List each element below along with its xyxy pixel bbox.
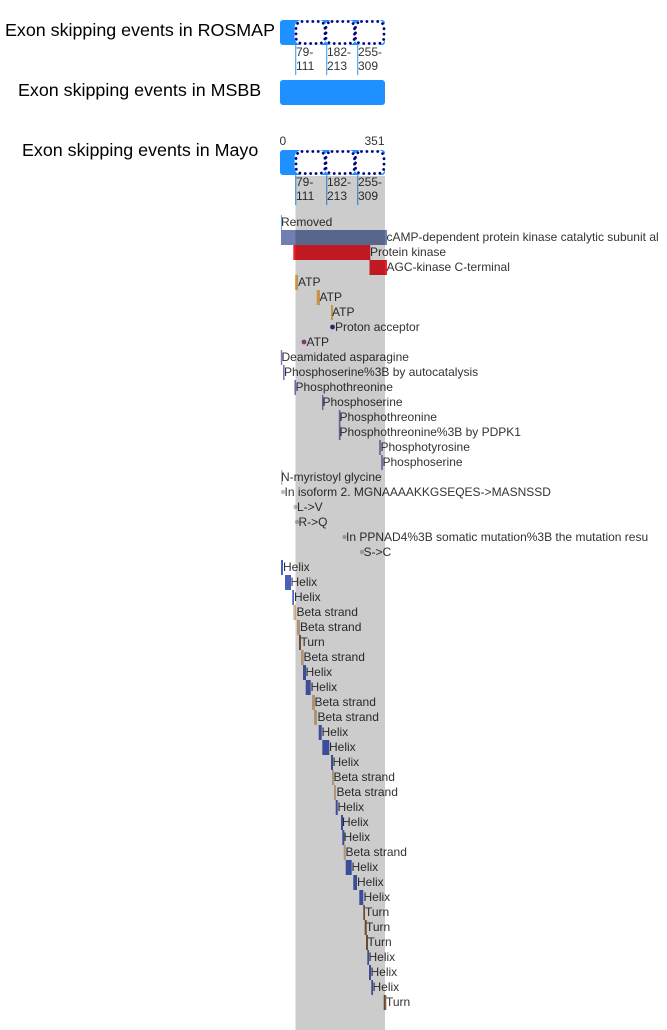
helix: Helix [342,815,369,829]
helix: Helix [332,755,359,769]
feature: ATP site: ATP [306,335,329,349]
feature: N-myristoyl glycine: N-myristoyl glycine [281,470,382,484]
track: MSBB bar [280,80,385,105]
exon highlight band [296,176,385,1030]
beta strand: Beta strand [336,785,398,799]
exon labels: Mayo: 182- [327,175,351,189]
turn: Turn [368,935,392,949]
feature: chain: cAMP-dependent protein kinase catalytic subunit al [386,230,659,244]
helix: Helix [344,830,370,844]
feature: chain [281,230,659,245]
beta strand: Beta strand [318,710,379,724]
feature: Phosphoserine: Phosphoserine [322,395,403,409]
feature: Phosphotyrosine: Phosphotyrosine [380,440,470,454]
exon labels: Mayo: 111 [296,189,315,203]
feature: R to Q: R->Q [298,515,328,529]
helix: Helix [290,575,317,589]
exon labels: ROSMAP: 309 [358,59,378,73]
feature: Removed: Removed [281,215,332,229]
turn: Turn [300,635,325,649]
exon labels: ROSMAP: 255- [358,45,382,59]
beta strand: Beta strand [300,620,361,634]
exon labels: Mayo: 213 [327,189,347,203]
helix: Helix [372,980,399,994]
helix: Helix [352,860,378,874]
axis labels: Mayo [280,134,385,148]
feature: Proton acceptor: Proton acceptor [335,320,420,334]
track: ROSMAP exons [280,20,385,45]
heading: MSBB: Exon skipping events in MSBB [18,80,261,100]
helix: Helix [338,800,364,814]
beta strand: Beta strand [334,770,395,784]
helix: Helix [368,950,395,964]
feature: Phosphothreonine: Phosphothreonine [296,380,393,394]
exon labels: Mayo: 309 [358,189,378,203]
heading: ROSMAP: Exon skipping events in ROSMAP [5,20,275,40]
feature: isoform 2: In isoform 2. MGNAAAAKKGSEQES->MASNSSD [284,485,551,499]
beta strand: Beta strand [314,695,376,709]
helix: Helix [322,725,348,739]
turn: Turn [386,995,410,1009]
exon labels: Mayo: 79- [296,175,313,189]
helix: Helix [283,560,310,574]
feature: Protein kinase domain: Protein kinase [370,245,446,259]
turn: Turn [365,905,389,919]
exon labels: ROSMAP: 182- [327,45,351,59]
feature: Deamidated asparagine: Deamidated asparagine [282,350,409,364]
axis labels: Mayo: 351 [364,134,385,148]
feature: Phosphoserine autocatalysis: Phosphoserine%3B by autocatalysis [284,365,478,379]
feature: Phosphothreonine PDPK1: Phosphothreonine%3B by PDPK1 [340,425,521,439]
axis labels: Mayo: 0 [280,134,286,148]
feature: S to C: S->C [364,545,392,559]
exon labels: Mayo: 255- [358,175,382,189]
helix: Helix [329,740,356,754]
heading: Mayo: Exon skipping events in Mayo [22,140,258,160]
helix: Helix [364,890,390,904]
helix: Helix [294,590,321,604]
helix: Helix [310,680,337,694]
beta strand: Beta strand [296,605,358,619]
feature: Phosphoserine: Phosphoserine [382,455,463,469]
feature: PPNAD4 mutation: In PPNAD4%3B somatic mutation%3B the mutation resu [346,530,648,544]
feature: Phosphothreonine: Phosphothreonine [340,410,437,424]
exon labels: ROSMAP: 111 [296,59,315,73]
exon labels: ROSMAP: 79- [296,45,313,59]
feature: ATP 1: ATP [298,275,320,289]
exon labels: ROSMAP: 213 [327,59,347,73]
exon labels: ROSMAP [295,45,382,75]
feature: Protein kinase domain [293,245,446,260]
beta strand: Beta strand [304,650,365,664]
feature: ATP 2: ATP [320,290,342,304]
helix: Helix [357,875,384,889]
turn: Turn [366,920,390,934]
helix: Helix [370,965,397,979]
feature: AGC-kinase domain: AGC-kinase C-terminal [386,260,510,274]
beta strand: Beta strand [346,845,407,859]
feature: ATP 3: ATP [332,305,354,319]
feature: L to V: L->V [297,500,323,514]
helix: Helix [306,665,332,679]
track: Mayo exons [280,150,385,175]
exon labels: Mayo [295,175,382,205]
